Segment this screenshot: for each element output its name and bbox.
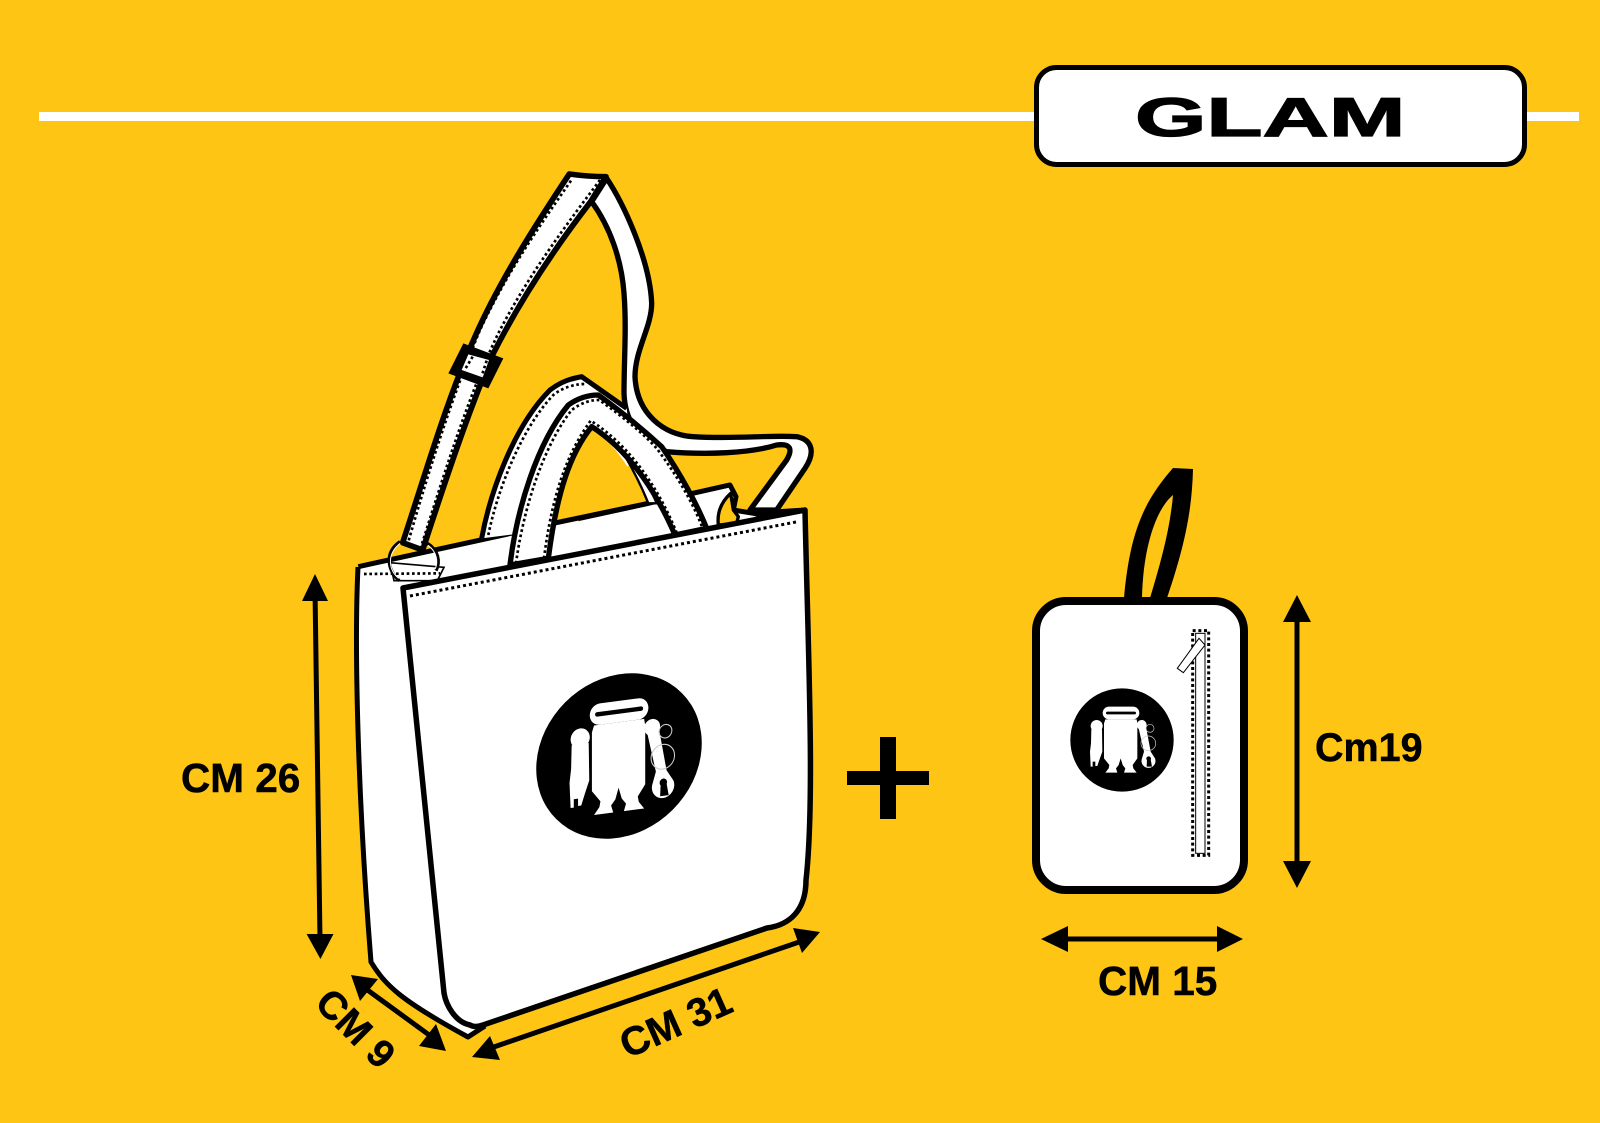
dimension: height 26 [181, 574, 334, 959]
front handle [510, 395, 707, 565]
title: GLAM [1135, 87, 1405, 148]
label: CM 31 [613, 979, 739, 1067]
front panel stitching [410, 522, 796, 596]
gusset outline [357, 567, 485, 1037]
header rule [39, 112, 1579, 121]
label: CM 26 [181, 755, 300, 801]
pouch body [1036, 601, 1244, 890]
strap buckle [448, 343, 503, 388]
back panel edge under arch [553, 503, 648, 523]
shoulder strap rear section [592, 178, 811, 510]
zipper [1177, 631, 1209, 855]
dimension: width 31 [472, 928, 820, 1067]
ring [389, 542, 438, 581]
zipper pull [1177, 638, 1205, 673]
title badge [1036, 68, 1524, 164]
notch in back panel [718, 493, 738, 525]
label: CM 15 [1098, 958, 1217, 1004]
back panel top edge [358, 485, 805, 567]
rear handle stitching [488, 384, 585, 535]
strap stitching [408, 180, 600, 550]
rear handle outline [482, 377, 627, 538]
front panel [403, 510, 810, 1026]
bag upper parts: straps and handles [358, 174, 811, 627]
plus sign [847, 737, 929, 819]
label: CM 9 [307, 981, 403, 1077]
illustration: pouch [1036, 468, 1244, 890]
tab [390, 563, 444, 581]
strap attachment knot [753, 509, 769, 517]
robot mark [1090, 707, 1156, 773]
pouch logo [1070, 688, 1174, 792]
robot mark [570, 694, 675, 818]
label: Cm19 [1315, 726, 1423, 770]
illustration: tote bag [357, 174, 811, 1037]
front handle stitching [516, 400, 703, 563]
dimension: pouch width 15 [1041, 926, 1243, 1004]
gusset stitching [364, 569, 440, 578]
pouch wrist loop [1124, 468, 1193, 598]
shoulder strap front section [403, 174, 606, 550]
dimension: depth 9 [307, 975, 446, 1077]
dimension: pouch height 19 [1283, 595, 1423, 888]
gusset fill [357, 535, 510, 1037]
yellow gap under arch [553, 427, 645, 523]
bag logo [502, 639, 736, 873]
back panel fill [358, 485, 805, 627]
gusset tab and D-ring [364, 542, 444, 581]
rear handle fill [482, 377, 633, 538]
rear handle inner leg [623, 453, 657, 503]
